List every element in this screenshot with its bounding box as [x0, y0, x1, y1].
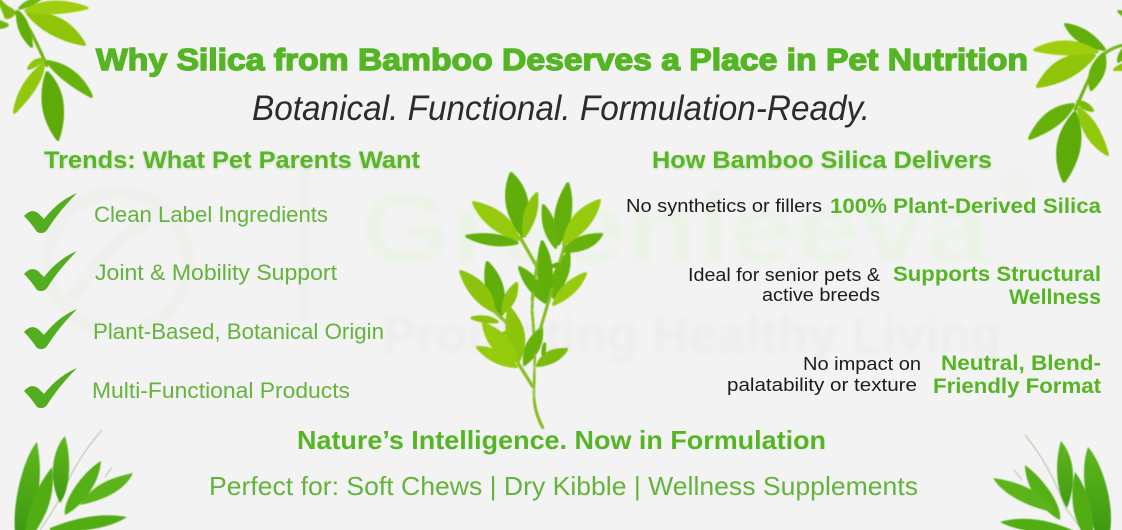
- trend item 2: Joint & Mobility Support: [95, 260, 337, 285]
- top-right bamboo branch: [1029, 11, 1122, 182]
- trend item 4: Multi-Functional Products: [92, 378, 350, 403]
- top-left bamboo branch: [0, 0, 92, 140]
- center bamboo sprig: [460, 173, 602, 428]
- benefit 1 title: 100% Plant-Derived Silica: [830, 195, 1101, 218]
- applications line: Perfect for: Soft Chews | Dry Kibble | Wellness Supplements: [209, 471, 918, 501]
- closing tagline: Nature’s Intelligence. Now in Formulation: [297, 425, 826, 455]
- benefit 3 title: [933, 352, 1101, 398]
- benefit 1 description: No synthetics or fillers: [626, 196, 822, 216]
- icon: check 1: [24, 193, 77, 233]
- benefit 3 description: palatability or texture: [727, 375, 917, 395]
- watermark trademark: ®: [1000, 161, 1032, 210]
- watermark tagline: Promoting Healthy Living: [382, 307, 1002, 363]
- trend item 1: Clean Label Ingredients: [94, 202, 328, 227]
- panel: trends: [24, 147, 420, 408]
- benefit 3 title: Neutral, Blend-: [941, 352, 1101, 375]
- icon: check 2: [24, 251, 77, 291]
- benefit 2 title: [893, 263, 1101, 309]
- watermark brand name: Greenleeva: [360, 173, 992, 283]
- bottom-left leaves: [15, 430, 133, 530]
- trend item 3: Plant-Based, Botanical Origin: [93, 319, 384, 344]
- benefit 2 description: [688, 265, 880, 305]
- watermark emblem: [48, 170, 305, 332]
- subtitle: Botanical. Functional. Formulation-Ready.: [252, 89, 870, 128]
- bottom-right leaves: [993, 435, 1111, 530]
- benefit 2 title: Supports Structural: [893, 263, 1101, 286]
- panel: how bamboo silica delivers: [626, 147, 1101, 398]
- benefit 3 title: Friendly Format: [933, 375, 1101, 398]
- benefit 2 title: Wellness: [1009, 286, 1101, 309]
- title: Why Silica from Bamboo Deserves a Place in Pet Nutrition: [96, 42, 1028, 77]
- benefit 3 description: [727, 354, 921, 395]
- icon: check 4: [24, 368, 77, 408]
- benefit 3 description: No impact on: [803, 354, 921, 374]
- heading: delivers: How Bamboo Silica Delivers: [652, 147, 992, 174]
- benefit 2 description: active breeds: [762, 285, 880, 305]
- benefit 2 description: Ideal for senior pets &: [688, 265, 880, 285]
- icon: check 3: [24, 309, 77, 349]
- heading: trends: Trends: What Pet Parents Want: [44, 147, 420, 174]
- watermark logo: [48, 161, 1032, 363]
